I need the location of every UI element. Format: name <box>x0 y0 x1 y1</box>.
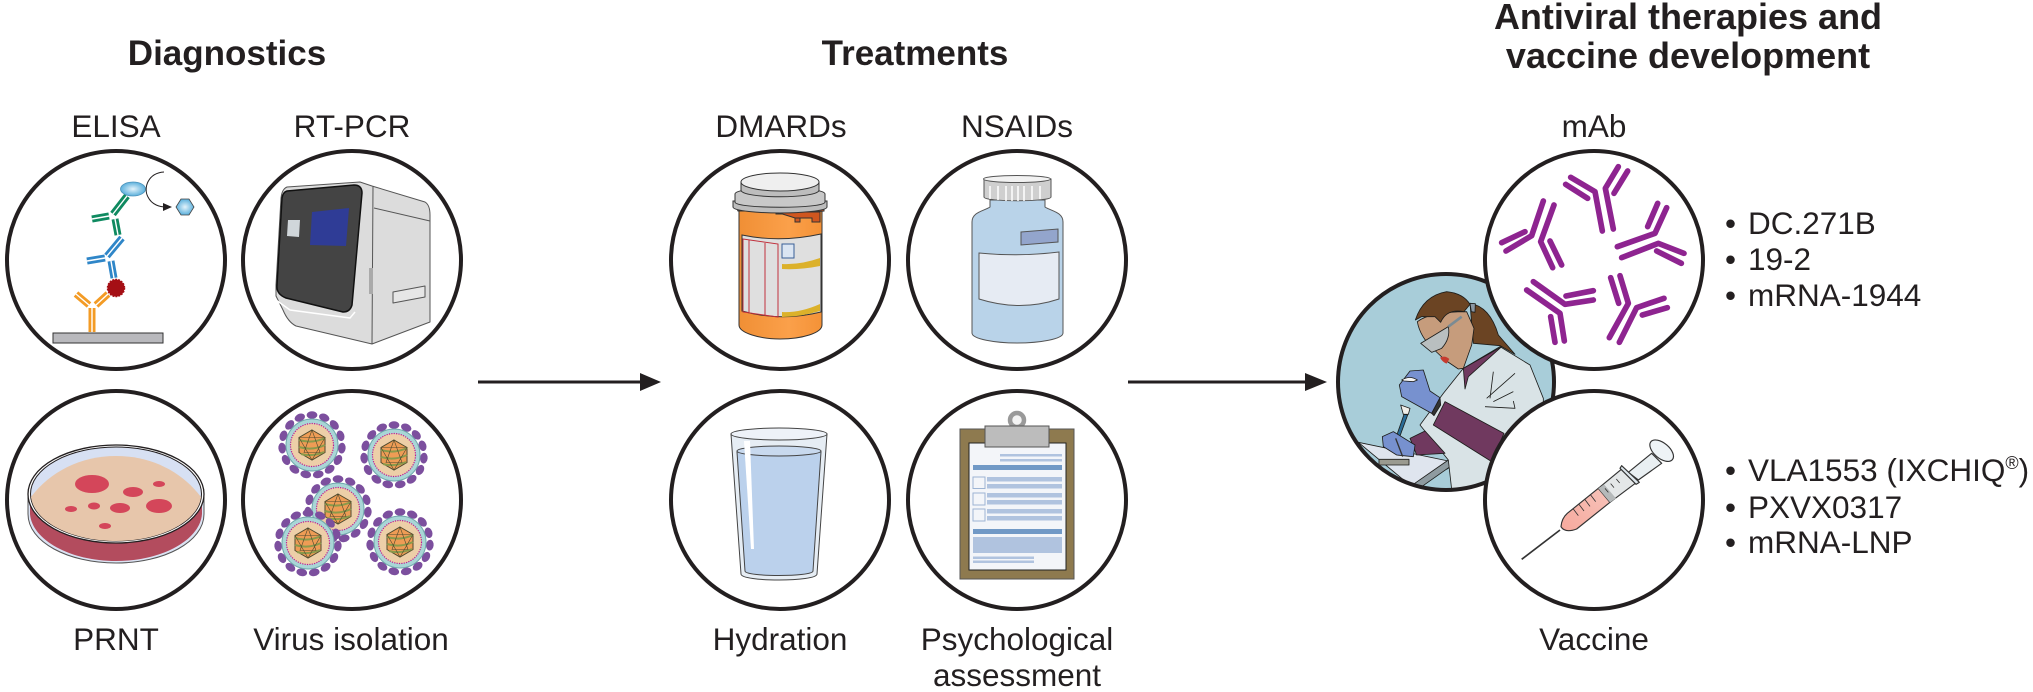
label: Psychological assessment: assessment <box>933 657 1101 692</box>
label: DMARDs: DMARDs <box>715 108 847 144</box>
panel: ELISA <box>7 108 225 369</box>
icon: product <box>176 199 194 215</box>
icon: capture antibody <box>76 294 108 332</box>
heading: Antiviral therapies and vaccine development: vaccine development <box>1506 35 1870 76</box>
label: Psychological assessment <box>921 621 1113 692</box>
panel: scientist <box>1338 274 1554 498</box>
icon: syringe <box>1522 436 1677 559</box>
heading: Diagnostics: Diagnostics <box>128 34 326 73</box>
icon: pill bottle <box>733 173 827 339</box>
heading: Treatments: Treatments <box>822 34 1008 73</box>
list: mAb candidates: • <box>1725 241 1736 277</box>
icon: petri dish <box>28 445 204 563</box>
circle: NSAIDs <box>908 151 1126 369</box>
circle: Virus isolation <box>243 391 461 609</box>
icon: reaction arrow <box>146 172 172 211</box>
circle outline: scientist <box>1338 274 1554 490</box>
icon: monoclonal antibodies <box>1502 167 1684 342</box>
label: NSAIDs: NSAIDs <box>961 108 1073 144</box>
list: mAb candidates <box>1725 205 1921 313</box>
circle: scientist <box>1338 274 1554 490</box>
icon: antigen <box>108 280 124 296</box>
icon: plate <box>53 333 163 343</box>
list: mAb candidates: DC.271B <box>1748 205 1876 241</box>
icon: virus particles <box>274 411 434 577</box>
icon: detection antibody <box>87 238 122 278</box>
icon: clipboard <box>960 413 1074 579</box>
panel: PRNT <box>7 391 225 657</box>
label: RT-PCR: RT-PCR <box>294 108 410 144</box>
panel: DMARDs <box>671 108 889 369</box>
arrow: treatments to antiviral therapies <box>1128 373 1327 391</box>
label: ELISA: ELISA <box>71 108 161 144</box>
label: Vaccine: Vaccine <box>1539 621 1649 657</box>
icon: PCR machine <box>276 182 430 344</box>
list: vaccine candidates: • <box>1725 489 1736 525</box>
circle: Psychological assessment <box>908 391 1126 609</box>
list: vaccine candidates: mRNA-LNP <box>1748 524 1913 560</box>
illustration: scientist with pipette <box>1358 292 1543 498</box>
label: Psychological assessment: Psychological <box>921 621 1113 657</box>
circle: Hydration <box>671 391 889 609</box>
list: vaccine candidates <box>1725 452 2029 560</box>
panel: NSAIDs <box>908 108 1126 369</box>
panel: Psychological assessment <box>908 391 1126 692</box>
panel: Vaccine <box>1485 391 1703 657</box>
panel: mAb <box>1485 108 1703 369</box>
icon: water glass <box>731 428 827 580</box>
label: mAb: mAb <box>1562 108 1626 144</box>
list: mAb candidates: mRNA-1944 <box>1748 277 1921 313</box>
list: vaccine candidates: • <box>1725 452 1736 488</box>
list: vaccine candidates: PXVX0317 <box>1748 489 1902 525</box>
heading: Antiviral therapies and vaccine development <box>1494 0 1882 76</box>
label: Hydration: Hydration <box>713 621 847 657</box>
panel: RT-PCR <box>243 108 461 369</box>
list: vaccine candidates: VLA1553 (IXCHIQ <box>1748 452 2005 488</box>
circle: RT-PCR <box>243 151 461 369</box>
arrow: diagnostics to treatments <box>478 373 661 391</box>
circle: DMARDs <box>671 151 889 369</box>
list: vaccine candidates: ® <box>2005 453 2019 473</box>
label: Virus isolation: Virus isolation <box>253 621 449 657</box>
panel: Virus isolation <box>243 391 461 657</box>
panel: Hydration <box>671 391 889 657</box>
icon: enzyme antibody <box>92 196 127 235</box>
list: vaccine candidates: ) <box>2019 452 2029 488</box>
icon: medicine bottle <box>972 176 1063 343</box>
list: mAb candidates: 19-2 <box>1748 241 1811 277</box>
list: vaccine candidates: • <box>1725 524 1736 560</box>
circle: mAb <box>1485 151 1703 369</box>
circle: PRNT <box>7 391 225 609</box>
label: PRNT: PRNT <box>73 621 159 657</box>
circle: Vaccine <box>1485 391 1703 609</box>
list: mAb candidates: • <box>1725 205 1736 241</box>
circle: ELISA <box>7 151 225 369</box>
icon: enzyme <box>120 182 146 196</box>
list: mAb candidates: • <box>1725 277 1736 313</box>
